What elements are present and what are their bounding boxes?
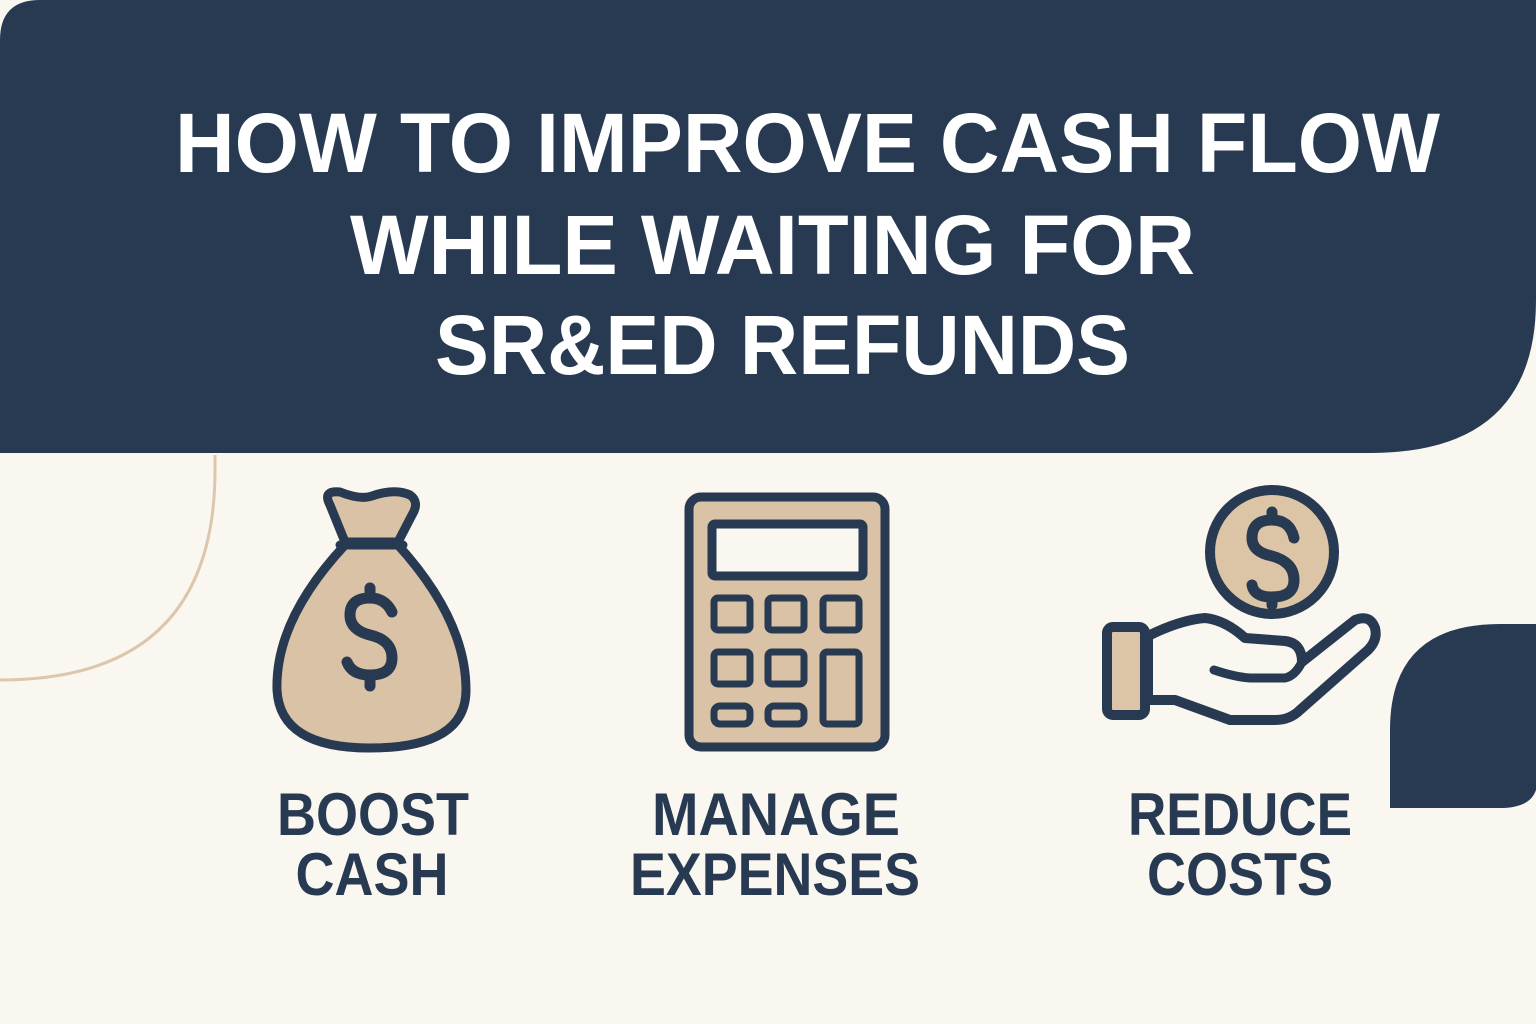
label: manage expenses: MANAGE xyxy=(652,781,900,848)
title: HOW TO IMPROVE CASH FLOW xyxy=(175,96,1441,190)
label: manage expenses xyxy=(630,781,920,908)
labels xyxy=(277,781,1352,908)
label: boost cash: CASH xyxy=(296,841,448,908)
icon: calculator xyxy=(689,497,885,747)
title xyxy=(175,96,1441,392)
label: manage expenses: EXPENSES xyxy=(630,841,920,908)
title: SR&ED REFUNDS xyxy=(435,298,1130,392)
label: boost cash xyxy=(277,781,469,908)
header banner background xyxy=(0,0,1536,453)
decorative beige arc xyxy=(0,455,215,680)
label: reduce costs: COSTS xyxy=(1147,841,1333,908)
label: reduce costs: REDUCE xyxy=(1128,781,1352,848)
icon: money bag xyxy=(277,492,466,748)
label: reduce costs xyxy=(1128,781,1352,908)
icon: hand with coin xyxy=(1107,490,1376,720)
label: boost cash: BOOST xyxy=(277,781,469,848)
title: WHILE WAITING FOR xyxy=(350,198,1195,292)
navy corner shape xyxy=(1390,624,1536,808)
